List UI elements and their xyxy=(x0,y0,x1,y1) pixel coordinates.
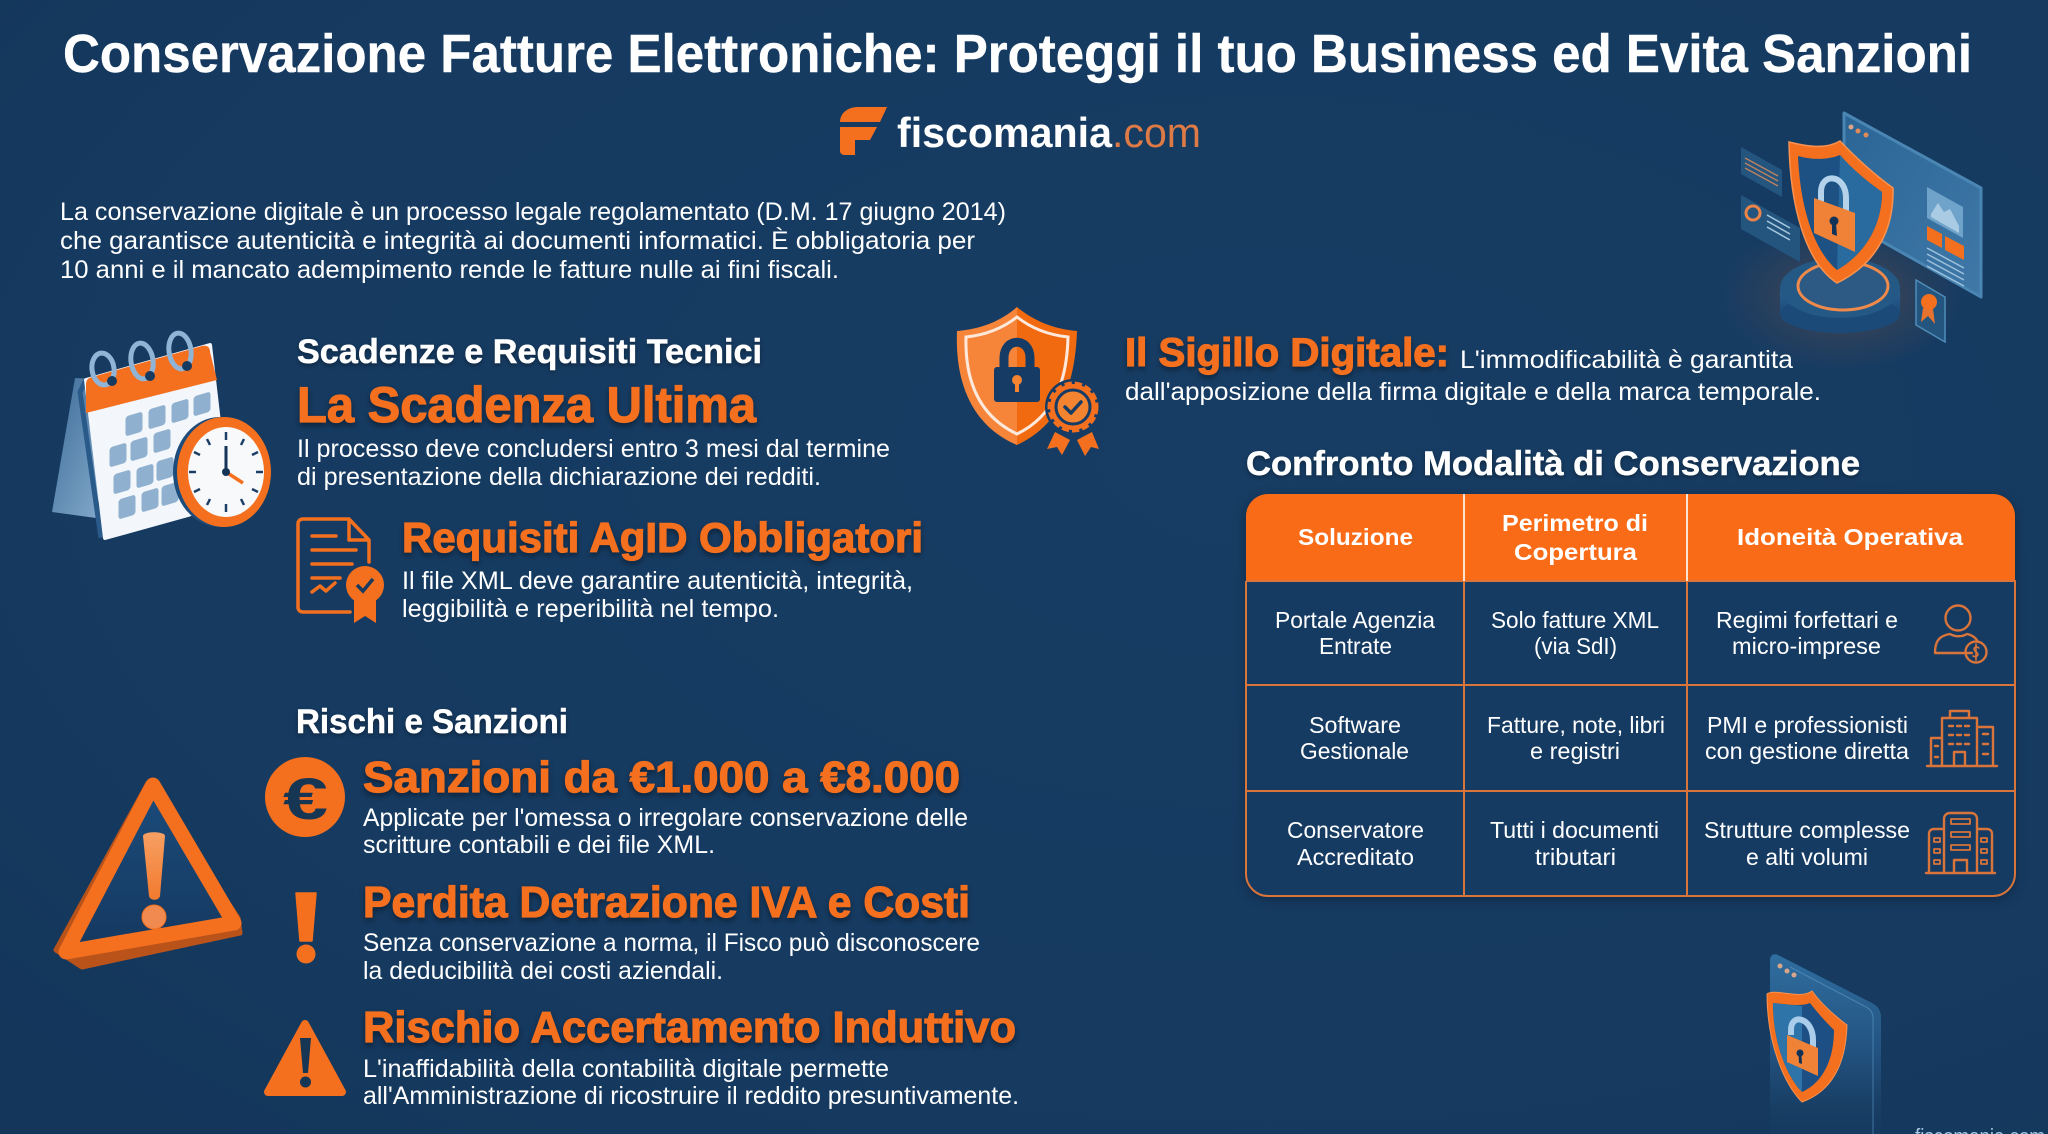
text: requisiti xyxy=(402,567,913,623)
section: comparison table xyxy=(1246,445,2015,896)
heading: rischi: Rischi e Sanzioni xyxy=(296,703,568,741)
table row 2: e registri xyxy=(1530,738,1620,764)
icon: large warning triangle xyxy=(56,783,240,967)
icon: euro coin xyxy=(265,757,345,837)
table frame and grid xyxy=(1246,494,2015,896)
subheading: Requisiti AgID: Requisiti AgID Obbligatori xyxy=(402,514,923,561)
table row 2 xyxy=(1300,712,1910,764)
sanction 3: L'inaffidabilità della contabilità digitale permette xyxy=(363,1055,889,1083)
logo: fiscomania.com: fiscomania xyxy=(897,109,1113,156)
text: Il Sigillo Digitale: L'immodificabilità è garantita xyxy=(1460,346,1793,374)
table row 1: Entrate xyxy=(1319,633,1392,659)
table row 1: Portale Agenzia xyxy=(1275,607,1436,633)
icon: person with dollar xyxy=(1935,606,1986,662)
icon: large building complex xyxy=(1926,813,1995,873)
sanction 2 xyxy=(363,878,980,985)
intro text block: 10 anni e il mancato adempimento rende le fatture nulle ai fini fiscali. xyxy=(60,256,839,284)
title: Conservazione Fatture Elettroniche: Proteggi il tuo Business ed Evita Sanzioni xyxy=(63,24,1972,84)
subheading: La Scadenza Ultima: La Scadenza Ultima xyxy=(297,377,757,433)
heading: scadenze: Scadenze e Requisiti Tecnici xyxy=(297,333,762,371)
intro text block: La conservazione digitale è un processo legale regolamentato (D.M. 17 giugno 2014) xyxy=(60,198,1006,226)
table row 2: PMI e professionisti xyxy=(1707,712,1908,738)
table row 3: Tutti i documenti xyxy=(1490,817,1659,843)
icon: digital seal shield with rosette xyxy=(957,307,1101,456)
table row 2: Fatture, note, libri xyxy=(1487,712,1665,738)
sanction 2: Senza conservazione a norma, il Fisco può disconoscere xyxy=(363,929,980,957)
section: Rischi e Sanzioni xyxy=(56,703,1019,1110)
icon: exclamation mark xyxy=(296,893,316,964)
icon: office building xyxy=(1927,711,1997,766)
table row 2: con gestione diretta xyxy=(1705,738,1910,764)
icon: certified document xyxy=(298,519,384,623)
table row 3: Strutture complesse xyxy=(1704,817,1910,843)
intro text block: che garantisce autenticità e integrità ai documenti informatici. È obbligatoria per xyxy=(60,226,975,255)
table header: Perimetro di xyxy=(1502,510,1648,536)
sanction 3 xyxy=(363,1003,1019,1110)
text: scadenza: di presentazione della dichiarazione dei redditi. xyxy=(297,463,821,491)
table row 3: Conservatore xyxy=(1287,817,1424,843)
sanction 2: Perdita Detrazione IVA e Costi xyxy=(363,878,970,927)
logo: fiscomania.com xyxy=(840,107,1201,156)
table header xyxy=(1298,510,1964,565)
table row 3 xyxy=(1287,817,1910,870)
table row 2: Software xyxy=(1309,712,1401,738)
sanction 1 xyxy=(363,753,968,859)
text: requisiti: leggibilità e reperibilità nel tempo. xyxy=(402,595,779,623)
sanction 1: scritture contabili e dei file XML. xyxy=(363,831,715,859)
text: Il Sigillo Digitale: Il Sigillo Digitale: xyxy=(1125,331,1449,375)
sanction 3: Rischio Accertamento Induttivo xyxy=(363,1003,1016,1052)
table header: Idoneità Operativa xyxy=(1737,524,1964,550)
text: Il Sigillo Digitale: dall'apposizione della firma digitale e della marca temporale. xyxy=(1125,378,1821,406)
table row 3: e alti volumi xyxy=(1746,844,1868,870)
icon: small warning triangle xyxy=(268,1024,342,1092)
table row 1: Regimi forfettari e xyxy=(1716,607,1898,633)
text: requisiti: Il file XML deve garantire autenticità, integrità, xyxy=(402,567,913,595)
table row 1: (via SdI) xyxy=(1534,633,1617,659)
icon: calendar with clock xyxy=(52,332,271,538)
table header: Copertura xyxy=(1514,539,1638,565)
sanction 2: la deducibilità dei costi aziendali. xyxy=(363,957,723,985)
table row 3: Accreditato xyxy=(1297,844,1414,870)
illustration: bottom shield on window xyxy=(1767,954,1881,1134)
table row 1: micro-imprese xyxy=(1732,633,1881,659)
table row 1 xyxy=(1275,607,1898,659)
table row 1: Solo fatture XML xyxy=(1491,607,1659,633)
text: scadenza: Il processo deve concludersi entro 3 mesi dal termine xyxy=(297,435,890,463)
illustration: isometric shield on pedestal with windows xyxy=(1722,113,1981,370)
text: scadenza xyxy=(297,435,890,491)
logo: fiscomania.com: .com xyxy=(1112,109,1201,156)
text: Il Sigillo Digitale xyxy=(1125,331,1821,406)
table row 3: tributari xyxy=(1535,844,1616,870)
icon: euro coin: € xyxy=(283,767,328,832)
sanction 3: all'Amministrazione di ricostruire il reddito presuntivamente. xyxy=(363,1082,1019,1110)
heading: confronto: Confronto Modalità di Conservazione xyxy=(1246,445,1860,483)
sanction 1: Applicate per l'omessa o irregolare conservazione delle xyxy=(363,804,968,832)
table row 2: Gestionale xyxy=(1300,738,1409,764)
sanction 1: Sanzioni da €1.000 a €8.000 xyxy=(363,753,960,802)
table header: Soluzione xyxy=(1298,524,1413,550)
section: Scadenze e Requisiti Tecnici xyxy=(297,333,923,623)
intro text block xyxy=(60,198,1006,284)
